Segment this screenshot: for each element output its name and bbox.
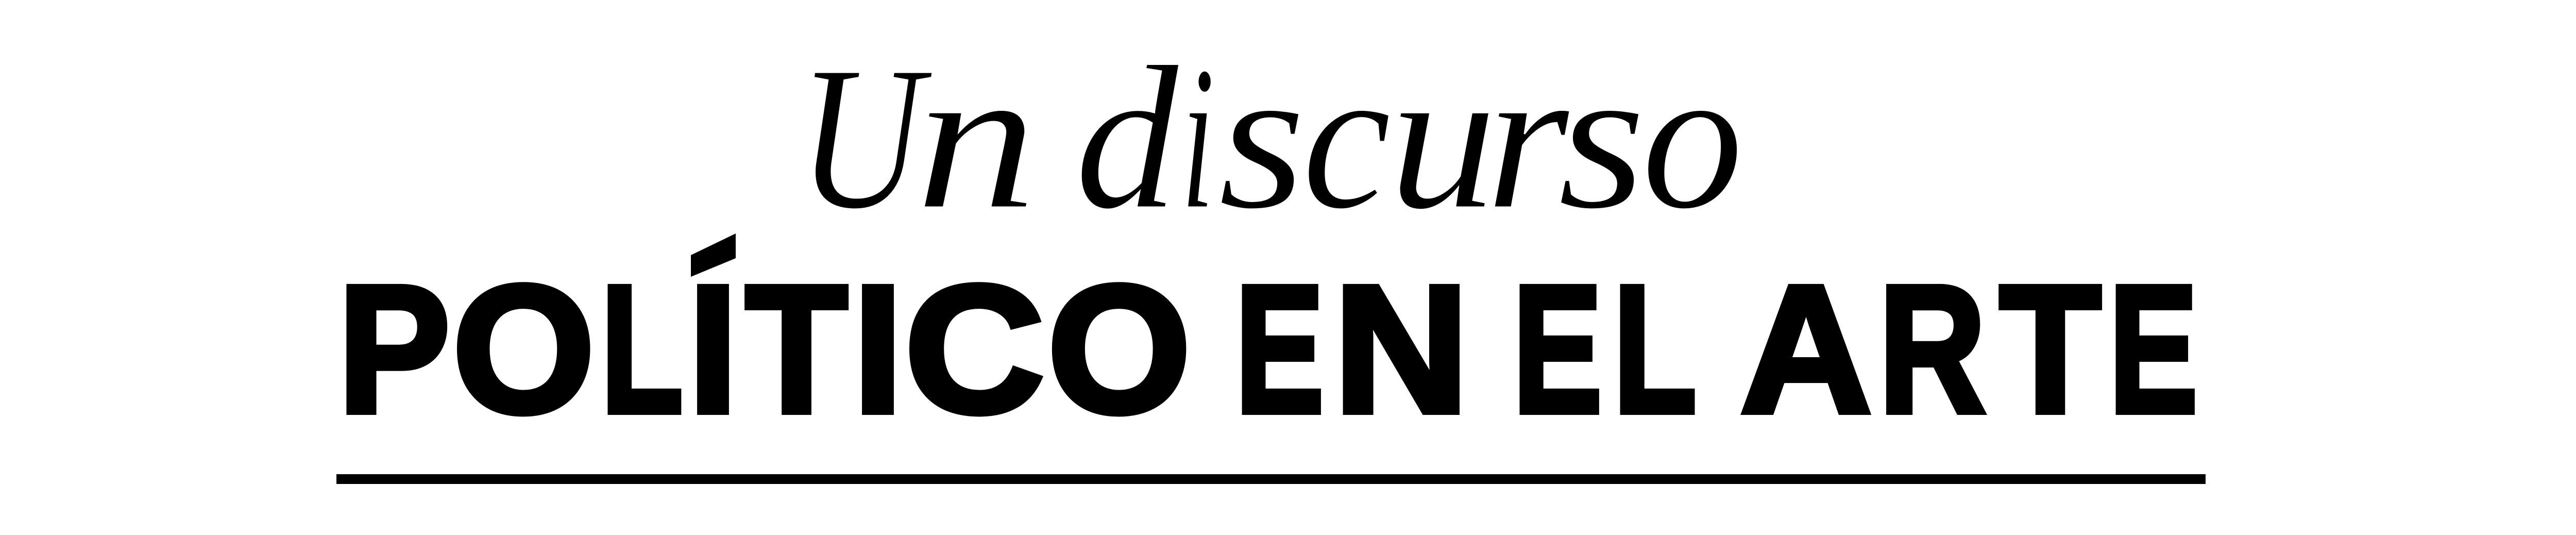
accent mask over default accent <box>683 222 755 280</box>
title line 1: italic serif: i <box>1181 24 1215 252</box>
accent mark over I <box>691 233 736 277</box>
title line 2: bold sans capitals: P <box>338 247 450 450</box>
title line 2: bold sans capitals: E <box>1513 247 1602 450</box>
title line 1: italic serif: n <box>915 24 1038 252</box>
title line 2: bold sans capitals: R <box>1879 247 1986 450</box>
title line 2: bold sans capitals: L <box>601 247 683 450</box>
title line 2: bold sans capitals: T <box>745 247 848 450</box>
title line 2: bold sans capitals: N <box>1333 247 1469 450</box>
title line 2: bold sans capitals: Í <box>688 247 744 450</box>
title line 1: italic serif: s <box>1557 24 1647 252</box>
title line 2: bold sans capitals: E <box>2109 247 2198 450</box>
title line 2: bold sans capitals: C <box>905 247 1044 450</box>
horizontal rule under title <box>336 474 2206 484</box>
title line 1: italic serif: u <box>1388 24 1497 252</box>
title line 1: italic serif: s <box>1218 24 1306 252</box>
title line 2: bold sans capitals: T <box>1999 247 2101 450</box>
title line 2: bold sans capitals: O <box>452 247 595 450</box>
title line 1: italic serif: d <box>1075 24 1182 252</box>
title line 2: bold sans capitals: O <box>1047 247 1191 450</box>
title line 1: italic serif: U <box>798 24 933 252</box>
title line 2: bold sans capitals: I <box>853 247 903 450</box>
title line 2: bold sans capitals: L <box>1613 247 1694 450</box>
title line 1: italic serif: r <box>1485 24 1573 252</box>
title line 1: italic serif: c <box>1302 24 1392 252</box>
title line 2: bold sans capitals: E <box>1235 247 1324 450</box>
title line 2: bold sans capitals: A <box>1740 247 1872 450</box>
title line 1: italic serif: o <box>1641 24 1743 252</box>
